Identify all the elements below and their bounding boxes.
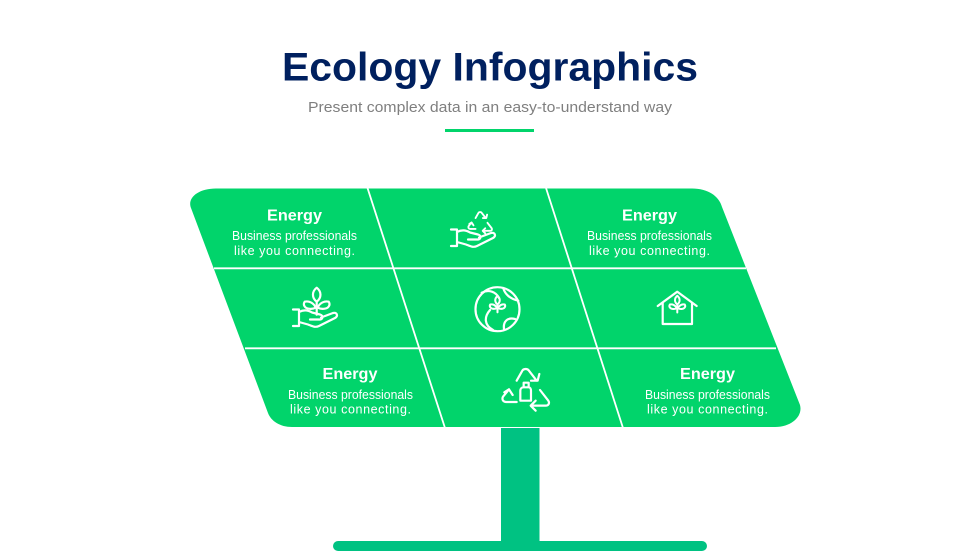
text block: top left	[232, 208, 357, 258]
icon: recycling arrows around bottle	[502, 369, 549, 411]
icon: hand holding recycle symbol	[451, 212, 495, 247]
text block: bottom right: Energy	[680, 366, 735, 383]
text block: top left: Business professionals	[232, 229, 357, 243]
text block: bottom right: like you connecting.	[647, 402, 768, 416]
text block: top right: Business professionals	[587, 229, 712, 243]
text block: bottom left	[288, 366, 413, 416]
text block: top left: Energy	[267, 208, 322, 224]
stand pole	[501, 428, 540, 542]
text block: bottom right: Business professionals	[645, 388, 770, 402]
text block: top right: Energy	[622, 208, 677, 224]
text block: top right: like you connecting.	[589, 244, 710, 258]
text block: top left: like you connecting.	[234, 244, 355, 258]
text block: bottom right	[645, 366, 770, 416]
text block: bottom left: Business professionals	[288, 388, 413, 402]
stand base	[333, 541, 707, 551]
icon: globe with sprout	[476, 287, 520, 331]
subtitle: Present complex data in an easy-to-understand way	[308, 99, 673, 116]
title: Ecology Infographics	[282, 46, 698, 90]
title underline	[445, 129, 534, 132]
text block: bottom left: like you connecting.	[290, 402, 411, 416]
text block: top right	[587, 208, 712, 258]
solar panel	[190, 188, 800, 428]
text block: bottom left: Energy	[322, 366, 378, 383]
icon: hand holding plant	[293, 288, 337, 327]
icon: house with sprout	[658, 292, 697, 324]
